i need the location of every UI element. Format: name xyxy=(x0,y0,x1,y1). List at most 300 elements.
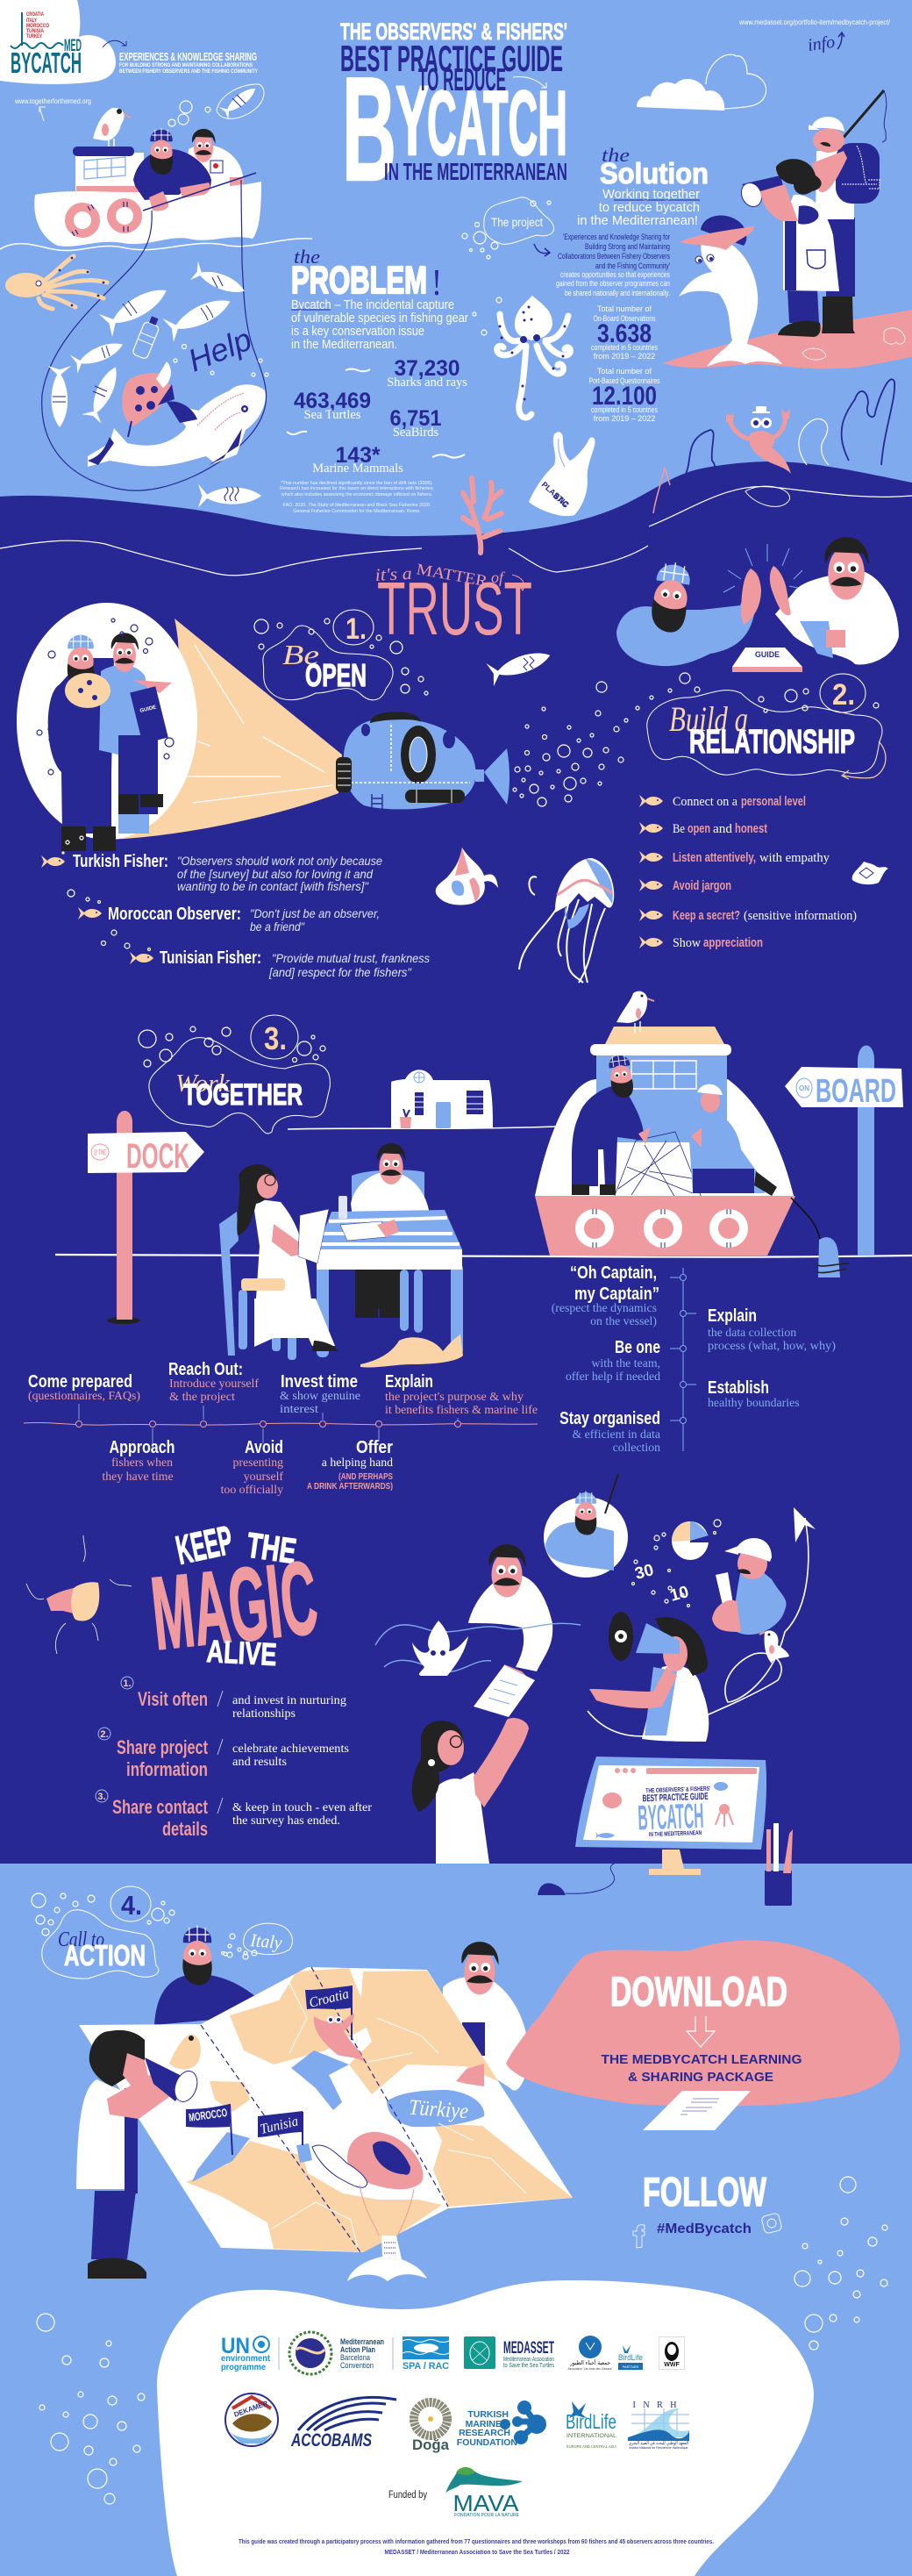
step: establish: healthy boundaries xyxy=(708,1396,800,1409)
step: oh captain: “Oh Captain, xyxy=(570,1263,657,1283)
heading: keep the magic alive: ALIVE xyxy=(206,1633,278,1672)
fish in bubble xyxy=(217,82,264,119)
heading: it's a matter of trust: TRUST xyxy=(377,568,532,651)
fish 4 xyxy=(70,335,126,374)
blob: Italy xyxy=(243,1923,293,1955)
sign: at the dock: DOCK xyxy=(126,1137,189,1176)
tip 1: Connect on a xyxy=(673,795,738,809)
boat cabin xyxy=(75,153,144,193)
fisher hauling net xyxy=(572,1053,651,1195)
tip: visit often: 1. xyxy=(123,1678,132,1689)
sea wave lines xyxy=(0,486,912,576)
woman xyxy=(237,1164,338,1351)
tip: share project information: and results xyxy=(232,1756,287,1769)
dolphin with hat xyxy=(679,216,782,367)
porthole glass xyxy=(410,737,427,772)
fisher high five xyxy=(616,561,761,666)
logo: MAVA: MAVA xyxy=(452,2490,519,2516)
upper ground line xyxy=(288,1127,555,1129)
logo: wordmark xyxy=(11,37,82,79)
bubbles near Italy xyxy=(221,1934,257,1959)
text: package name xyxy=(602,2053,802,2085)
woman with binoculars at map xyxy=(76,2030,201,2279)
logo: BirdLife International: INTERNATIONAL xyxy=(566,2433,616,2439)
logo: INRH: I N R H xyxy=(633,2401,679,2410)
heading: it's a matter of trust xyxy=(374,560,532,651)
porthole xyxy=(401,726,436,784)
logo: Les Amis des Oiseaux: جمعية أحباء الطيور xyxy=(569,2358,610,2366)
heading: the solution: Solution xyxy=(600,157,709,190)
sign: at the dock xyxy=(88,1111,204,1324)
text: credits: MEDASSET / Mediterranean Association to Save the Sea Turtles / 2022 xyxy=(384,2548,570,2556)
plastic bag: BAG xyxy=(552,491,570,510)
text: project description: gained from the observer programmes can xyxy=(556,279,670,288)
tip 2: open xyxy=(688,822,710,836)
step: offer: a helping hand xyxy=(322,1456,393,1469)
seagull on arrow xyxy=(759,1630,789,1664)
infographic canvas: MAGIC xyxy=(146,1540,323,1672)
step: invest time xyxy=(280,1372,360,1415)
text: footnote: which also includes assessing the economic damage inflicted on fishers. xyxy=(281,492,432,497)
heading: it's a matter of trust: MATTER xyxy=(415,560,489,590)
map borders xyxy=(272,1983,526,2255)
seagull on roof xyxy=(616,991,654,1034)
step: explain data: the data collection xyxy=(708,1326,796,1339)
fishing rod xyxy=(820,90,884,165)
heading: keep the magic alive: THE xyxy=(245,1526,298,1571)
decorative arrow in title xyxy=(513,77,546,88)
tip: share project information xyxy=(98,1728,349,1780)
text: package name: & SHARING PACKAGE xyxy=(628,2071,773,2085)
text: website link left: www.togetherforthemed.org xyxy=(14,97,91,105)
observer hand on map xyxy=(456,2064,484,2086)
net outline xyxy=(42,180,267,490)
step 3 number: 3. xyxy=(264,1020,287,1056)
octopus xyxy=(497,296,570,418)
heading: keep the magic alive: KEEP xyxy=(172,1517,237,1573)
logo: SPA/RAC: SPA / RAC xyxy=(403,2361,449,2372)
tip 3: with empathy xyxy=(759,851,830,865)
jellyfish doodles on island xyxy=(802,328,905,360)
bubbles behind submarine xyxy=(513,682,639,806)
step: oh captain: my Captain” xyxy=(574,1284,659,1304)
seagull on boat xyxy=(93,108,131,149)
stat: marine mammals: Marine Mammals xyxy=(312,462,403,476)
illustration: interview at the dock table xyxy=(219,1143,463,1367)
logo: INRH xyxy=(628,2401,689,2450)
tip 6: appreciation xyxy=(703,936,763,950)
illustration: fishing boat with fisher and observer xyxy=(34,128,261,247)
title: TO REDUCE xyxy=(418,61,506,97)
logo: Turkish Marine Research Foundation xyxy=(457,2401,546,2448)
step 2 number xyxy=(820,674,866,712)
pink island xyxy=(663,310,912,369)
step: approach xyxy=(102,1438,175,1483)
quote: Tunisian fisher xyxy=(130,948,430,979)
sign: on board xyxy=(785,1046,903,1256)
text: project description xyxy=(556,233,670,297)
map base xyxy=(79,1967,573,2252)
roof xyxy=(590,1044,731,1055)
text: footnote: General Fisheries Commission for the Mediterranean. Rome. xyxy=(293,509,421,514)
fish 6 xyxy=(82,362,125,424)
observer with binoculars xyxy=(737,159,839,337)
step: explain data: process (what, how, why) xyxy=(708,1339,836,1353)
bubbles lower left xyxy=(37,2314,145,2504)
boat hull xyxy=(34,182,261,247)
quote: Moroccan observer: "Don't just be an observer, xyxy=(250,907,380,920)
fisher holding squid xyxy=(48,633,116,851)
text: credits: This guide was created through a participatory process with information gathered from 77 questionnaires and three workshops from 60 fishers and 45 observers across three countries. xyxy=(239,2537,714,2545)
blob: be open: OPEN xyxy=(305,657,367,693)
stat: sharks and rays: Sharks and rays xyxy=(387,376,467,390)
panel: download blob xyxy=(506,1940,900,2106)
logo: UN environment programme: programme xyxy=(221,2362,266,2372)
blob: the project: The project xyxy=(491,216,543,229)
blob: work together: Work xyxy=(175,1070,231,1098)
fisher with backpack xyxy=(809,117,880,333)
bubbles near step 2 xyxy=(650,673,879,712)
man handing paper xyxy=(468,1544,552,1717)
coral xyxy=(463,478,502,553)
observer on boat xyxy=(184,129,244,198)
step: avoid xyxy=(221,1438,283,1496)
bubbles near step 1 xyxy=(254,619,428,695)
bubbles near step 4 xyxy=(32,1893,175,1936)
tip: share project information: celebrate achievements xyxy=(232,1742,349,1756)
tip 2: and xyxy=(713,822,733,836)
logo: SPA/RAC xyxy=(403,2336,449,2372)
mini octopus xyxy=(716,1804,733,1827)
mini guide title: IN THE MEDITERRANEAN xyxy=(649,1830,702,1838)
quote: Tunisian fisher: [and] respect for the fishers" xyxy=(268,966,412,979)
title: THE OBSERVERS' & FISHERS' xyxy=(340,18,567,45)
buoy with rope xyxy=(791,1198,849,1277)
title xyxy=(340,18,567,211)
logo: MEDASSET: Mediterranean Association xyxy=(503,2355,554,2363)
colorful fish xyxy=(436,848,498,905)
stat: seabirds: 6,751 xyxy=(389,406,442,431)
logo: Mediterranean Action Plan: Barcelona xyxy=(340,2353,370,2362)
roof top xyxy=(605,1027,724,1044)
fish 2 xyxy=(99,279,173,337)
tip 3 xyxy=(639,851,830,865)
text: project description: creates opportunities so that experiences xyxy=(560,270,670,279)
browser bar xyxy=(615,1768,757,1774)
computer monitor: BYCATCH xyxy=(638,1797,704,1837)
tip: visit often xyxy=(121,1677,346,1721)
man's chair xyxy=(352,1170,424,1214)
bubbles near numbers xyxy=(631,1520,721,1607)
mini turtle xyxy=(602,1792,622,1808)
plastic bag: PLASTIC xyxy=(540,480,571,510)
man's legs xyxy=(355,1270,404,1318)
arrow: project to text xyxy=(534,244,550,256)
blob: Italy: Italy xyxy=(249,1929,283,1953)
tip: visit often: Visit often xyxy=(138,1688,208,1710)
tip: share project information: 2. xyxy=(100,1729,109,1740)
pink hook doodle xyxy=(653,468,670,513)
title: IN THE MEDITERRANEAN xyxy=(384,158,567,185)
blob: the project xyxy=(484,197,554,244)
logo: Les Amis des Oiseaux xyxy=(568,2336,612,2371)
step 2 number: 2. xyxy=(832,678,855,712)
step: approach: they have time xyxy=(102,1470,174,1483)
plastic bag xyxy=(529,432,595,516)
text: problem description xyxy=(291,298,468,352)
beam highlights xyxy=(184,645,333,803)
tip 6 xyxy=(639,936,763,950)
label: Türkiye: Türkiye xyxy=(408,2096,469,2123)
tail fin xyxy=(484,748,509,805)
icon: instagram xyxy=(761,2213,782,2234)
arrow: curving up xyxy=(588,1518,809,1736)
front lamp xyxy=(336,757,352,792)
bubbles top left xyxy=(168,101,210,126)
text: solution tagline: to reduce bycatch xyxy=(599,201,700,215)
squid xyxy=(5,256,107,309)
text: problem description: is a key conservation issue xyxy=(291,325,424,339)
text: project description: 'Experiences and Knowledge Sharing for xyxy=(563,233,670,241)
mini guide title: BEST PRACTICE GUIDE xyxy=(642,1792,709,1804)
heading: it's a matter of trust: of xyxy=(491,569,506,586)
white bell shape xyxy=(535,1079,794,1196)
sea wave navy lighter shape xyxy=(745,486,789,506)
bubbles near octopus xyxy=(473,297,502,335)
fishing line xyxy=(882,90,887,142)
step: be one: Be one xyxy=(615,1338,660,1357)
flag: Croatia: Croatia xyxy=(308,1986,351,2011)
hull life ring 3 xyxy=(714,1209,744,1248)
document xyxy=(643,2091,751,2130)
woman reaching up xyxy=(412,1718,529,1864)
circle: fisher with lobster xyxy=(544,1474,628,1578)
heading: the solution xyxy=(600,144,709,190)
stat: on-board observations: Total number of xyxy=(597,304,652,313)
illustration: submarine xyxy=(336,713,509,809)
illustration: high five xyxy=(616,537,899,672)
step: approach: fishers when xyxy=(111,1456,173,1469)
logo: Doga: Doğa xyxy=(412,2436,450,2453)
submarine hull xyxy=(344,719,476,809)
flag: Croatia xyxy=(305,1986,353,2040)
stat: marine mammals xyxy=(312,443,403,476)
map land xyxy=(186,1968,573,2252)
text: project description: Collaborations Between Fishery Observers xyxy=(558,252,670,261)
heading: it's a matter of trust: it's a xyxy=(374,564,412,585)
guide book xyxy=(732,648,802,672)
blob: build a relationship: Build a xyxy=(669,699,748,739)
stat: sea turtles: Sea Turtles xyxy=(304,408,361,422)
text: footnote: Research has increased for this taxon on direct interactions with fisheries, xyxy=(280,486,434,491)
cabin window xyxy=(631,1061,696,1089)
bottom capsule xyxy=(405,790,465,803)
tip: share contact details: the survey has ended. xyxy=(232,1814,340,1828)
text: project subtitle: EXPERIENCES & KNOWLEDGE SHARING xyxy=(119,50,257,63)
water glass xyxy=(338,1196,347,1219)
hull life ring 2 xyxy=(648,1209,678,1248)
computer mouse xyxy=(538,1857,631,1895)
logo: BirdLife International: EUROPE AND CENTRAL ASIA xyxy=(566,2444,616,2449)
quote: Moroccan observer: be a friend" xyxy=(250,920,305,934)
title: B xyxy=(342,47,396,211)
table xyxy=(317,1210,463,1357)
whale shark xyxy=(88,384,266,467)
quote: Turkish fisher: wanting to be in contact [with fishers]" xyxy=(177,880,369,893)
man's hand xyxy=(377,1220,399,1237)
tip 3: Listen attentively, xyxy=(673,851,756,865)
map highlighted countries xyxy=(192,2050,484,2182)
logo: INRH: Institut National de Recherche Halieutique xyxy=(629,2446,688,2450)
quote: Moroccan observer xyxy=(78,905,380,934)
logo: MEDASSET: MEDASSET xyxy=(503,2339,554,2358)
step: establish xyxy=(708,1378,800,1409)
bubbles inside light xyxy=(37,619,174,775)
woman's chair xyxy=(219,1212,296,1360)
fisher with cap writing xyxy=(712,1538,787,1635)
step 4 number xyxy=(110,1886,151,1921)
tip: share contact details: 3. xyxy=(97,1792,106,1802)
hull life ring 1 xyxy=(580,1209,609,1248)
illustration: net with catch xyxy=(42,180,268,490)
logo: country names: TURKEY xyxy=(26,34,42,39)
man at table xyxy=(351,1143,431,1233)
bubbles near step 3 xyxy=(139,1027,325,1067)
step: offer xyxy=(307,1438,393,1492)
logo: UN environment programme xyxy=(221,2334,270,2372)
step: oh captain: (respect the dynamics xyxy=(552,1301,657,1315)
computer monitor xyxy=(575,1757,766,1875)
icon: facebook xyxy=(633,2225,645,2248)
logo: Mediterranean Action Plan: Mediterranean xyxy=(340,2337,384,2346)
logo: Turkish Marine Research Foundation: RESEARCH xyxy=(459,2428,510,2438)
heading: download: DOWNLOAD xyxy=(610,1968,787,2014)
documents on table xyxy=(340,1221,386,1241)
text: help: Help xyxy=(183,321,257,378)
logo: country names: TUNISIA xyxy=(26,29,45,34)
tip 5: (sensitive information) xyxy=(744,909,857,923)
hull rivets xyxy=(351,725,470,783)
step: explain: the project's purpose & why xyxy=(385,1390,524,1403)
step: reach out xyxy=(168,1360,259,1403)
text: project description: and the Fishing Community' xyxy=(595,261,670,270)
logo: ACCOBAMS xyxy=(290,2397,396,2451)
tip 2: Be xyxy=(673,822,685,836)
title: BEST PRACTICE GUIDE xyxy=(340,38,563,79)
step: avoid: too officially xyxy=(221,1483,283,1496)
step: invest time: interest xyxy=(280,1402,318,1415)
step: be one xyxy=(566,1338,660,1383)
logo: DEKAMER: DEKAMER xyxy=(233,2399,269,2419)
hashtag: #MedBycatch xyxy=(657,2222,752,2236)
logo divider xyxy=(279,2337,393,2370)
wave lines around octopus xyxy=(375,1623,581,1672)
stat: seabirds: SeaBirds xyxy=(393,426,439,440)
quote: Tunisian fisher: "Provide mutual trust, frankness xyxy=(272,952,430,965)
infographic canvas: CATCH xyxy=(427,73,567,175)
cabin xyxy=(596,1055,727,1142)
ground line xyxy=(55,1255,912,1257)
step: avoid: presenting xyxy=(233,1456,283,1469)
fish 3 xyxy=(162,290,236,342)
arrow: logo to subtitle xyxy=(103,40,126,47)
step: invest time: & show genuine xyxy=(280,1389,360,1402)
text: project description: Building Strong and Maintaining xyxy=(585,242,670,251)
blob: work together: TOGETHER xyxy=(183,1078,303,1112)
step: oh captain: on the vessel) xyxy=(590,1314,657,1328)
logo: wordmark: BYCATCH xyxy=(11,47,82,79)
logo: Mediterranean Action Plan xyxy=(289,2332,384,2374)
step: stay organised: & efficient in data xyxy=(572,1428,660,1441)
observer hauling net xyxy=(689,1084,777,1196)
stat: port-based questionnaires: 12.100 xyxy=(592,382,657,411)
blob: call to action: Call to xyxy=(58,1928,104,1951)
illustration: on board boat xyxy=(535,1027,795,1256)
mini guide title xyxy=(637,1786,712,1838)
quote: Tunisian fisher: Tunisian Fisher: xyxy=(160,948,261,968)
logo: ACCOBAMS: ACCOBAMS xyxy=(290,2430,372,2451)
cloud xyxy=(637,54,766,111)
step: reach out: Reach Out: xyxy=(168,1360,243,1379)
logo: DEKAMER xyxy=(225,2394,278,2446)
text: problem description: Bycatch – The incidental capture xyxy=(291,298,454,312)
text: solution tagline: Working together xyxy=(602,188,700,202)
blob: build a relationship xyxy=(647,691,882,775)
step: stay organised: collection xyxy=(613,1441,660,1454)
white fish xyxy=(487,644,553,686)
tip: visit often: relationships xyxy=(232,1707,296,1721)
logo: MAVA xyxy=(445,2467,523,2518)
heading: the problem xyxy=(291,246,442,304)
text: website link right: www.medasset.org/portfolio-item/medbycatch-project/ xyxy=(738,18,891,26)
tip 5 xyxy=(639,909,857,923)
panel: dark sea band xyxy=(0,462,912,1864)
step 3 number xyxy=(251,1015,298,1059)
fish 1 xyxy=(190,261,248,301)
logo: country names: ITALY xyxy=(26,18,37,24)
seagull on map xyxy=(169,2034,201,2070)
step: offer: (AND PERHAPS xyxy=(338,1472,393,1482)
turtle xyxy=(122,361,175,437)
numbers: 30 and 10 xyxy=(633,1561,691,1606)
step: offer: A DRINK AFTERWARDS) xyxy=(307,1482,393,1492)
blob: be open xyxy=(263,626,393,700)
text: solution tagline xyxy=(577,188,700,228)
text: info label: info xyxy=(807,32,837,55)
lobster xyxy=(726,406,791,474)
heading: the solution: the xyxy=(602,144,630,166)
logo: Mediterranean Action Plan: Convention xyxy=(340,2361,374,2370)
step: approach: Approach xyxy=(109,1438,175,1457)
white house xyxy=(391,1070,493,1128)
quote: Turkish fisher: "Observers should work not only because xyxy=(177,855,382,868)
stat: port-based questionnaires: Total number of xyxy=(597,367,652,376)
text: problem description: of vulnerable species in fishing gear xyxy=(291,311,468,326)
timeline: at the dock xyxy=(24,1360,538,1496)
flag: Morocco: MOROCCO xyxy=(188,2106,228,2124)
tip 4 xyxy=(639,879,731,893)
cabin window xyxy=(84,157,125,179)
stat: port-based questionnaires: completed in 5 countries xyxy=(591,405,658,414)
bubbles around quotes xyxy=(62,836,151,951)
wave accents xyxy=(287,369,465,458)
title: Y xyxy=(395,66,429,175)
mini guide title: THE OBSERVERS' & FISHERS' xyxy=(645,1786,711,1794)
text: project description: be shared nationally and internationally. xyxy=(565,289,670,297)
logo: hook and waves xyxy=(11,12,63,48)
step 1 number xyxy=(333,610,374,646)
text: footnote xyxy=(280,481,434,514)
